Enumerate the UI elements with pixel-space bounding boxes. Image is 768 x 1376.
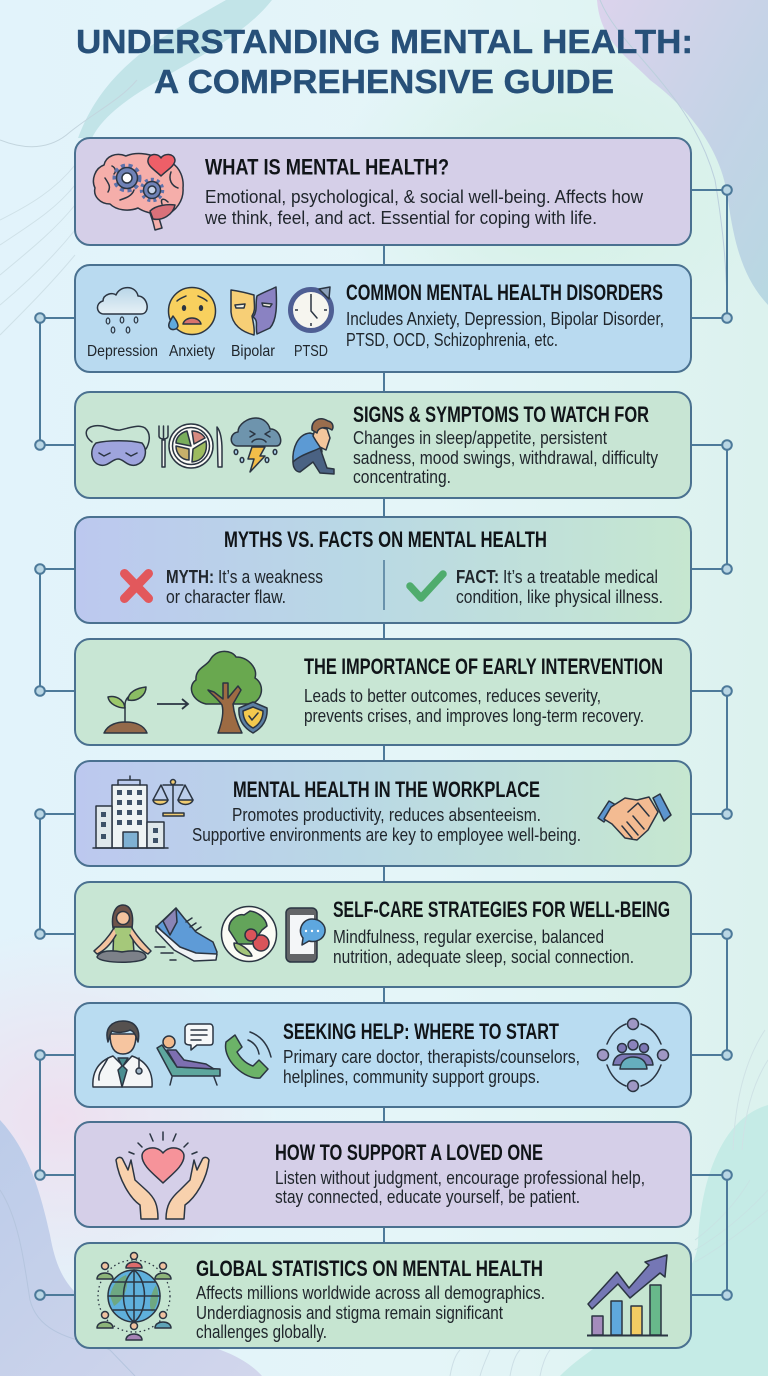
icon labels: [87, 343, 328, 360]
icon: brain with gears and heart: [93, 154, 183, 230]
fact text: condition, like physical illness.: [456, 587, 663, 607]
heading: MENTAL HEALTH IN THE WORKPLACE: [233, 777, 540, 802]
description: prevents crises, and improves long-term recovery.: [304, 706, 644, 726]
icon: bipolar masks: [231, 287, 276, 335]
heading: GLOBAL STATISTICS ON MENTAL HEALTH: [196, 1256, 543, 1281]
icon: green check: [410, 574, 443, 598]
icon: storm cloud: [231, 418, 281, 472]
panel: workplace: [75, 761, 691, 866]
icon: running shoe: [155, 908, 217, 961]
panel: what is mental health: [75, 138, 691, 245]
description: [204, 187, 644, 228]
icon: doctor: [93, 1021, 152, 1087]
description: sadness, mood swings, withdrawal, difficulty: [353, 448, 658, 468]
panel: signs and symptoms: [75, 392, 691, 498]
icon: tree with shield: [191, 651, 267, 733]
title: A COMPREHENSIVE GUIDE: [154, 63, 614, 100]
icon: anxious face: [168, 288, 216, 334]
description: Mindfulness, regular exercise, balanced: [333, 927, 604, 947]
description: stay connected, educate yourself, be patient.: [275, 1187, 580, 1207]
description: [275, 1168, 645, 1207]
description: Leads to better outcomes, reduces severity,: [304, 686, 601, 706]
description: challenges globally.: [196, 1322, 327, 1342]
description: Includes Anxiety, Depression, Bipolar Disorder,: [346, 309, 664, 329]
myth text: [166, 567, 323, 607]
panel: global statistics: [75, 1243, 691, 1348]
description: [192, 805, 581, 845]
panel: myths vs facts: [75, 517, 691, 623]
heading: MYTHS VS. FACTS ON MENTAL HEALTH: [224, 527, 547, 552]
icon: plate with food: [159, 424, 222, 468]
description: concentrating.: [353, 467, 451, 487]
fact text: FACT:: [456, 567, 499, 587]
arrow: [157, 699, 188, 709]
myth text: It’s a weakness: [218, 567, 323, 587]
title: UNDERSTANDING MENTAL HEALTH:: [76, 23, 693, 60]
description: [333, 927, 634, 967]
icon: office building and scales: [93, 776, 193, 848]
heading: SIGNS & SYMPTOMS TO WATCH FOR: [353, 402, 649, 427]
description: [353, 428, 658, 487]
description: Listen without judgment, encourage professional help,: [275, 1168, 645, 1188]
description: Emotional, psychological, & social well-being. Affects how: [205, 187, 644, 207]
icon: sad seated person: [293, 419, 334, 474]
description: Promotes productivity, reduces absenteeism.: [232, 805, 541, 825]
description: [346, 309, 664, 350]
icon: growth bar chart: [587, 1255, 668, 1336]
icon: sprout: [104, 687, 147, 733]
icon: salad plate: [222, 906, 276, 962]
description: Changes in sleep/appetite, persistent: [353, 428, 607, 448]
icon: therapy couch: [157, 1024, 220, 1085]
description: Underdiagnosis and stigma remain significant: [196, 1303, 503, 1323]
panel: support a loved one: [75, 1122, 691, 1227]
myth text: MYTH:: [166, 567, 214, 587]
myth text: or character flaw.: [166, 587, 286, 607]
description: [304, 686, 644, 726]
icon labels: Anxiety: [169, 343, 215, 360]
heading: WHAT IS MENTAL HEALTH?: [205, 154, 449, 180]
description: we think, feel, and act. Essential for coping with life.: [204, 208, 597, 228]
heading: COMMON MENTAL HEALTH DISORDERS: [346, 280, 663, 305]
icon labels: Bipolar: [231, 343, 276, 360]
description: Supportive environments are key to employee well-being.: [192, 825, 581, 845]
fact text: [456, 567, 663, 607]
panel: seeking help: [75, 1003, 691, 1107]
description: nutrition, adequate sleep, social connection.: [333, 947, 634, 967]
panel: self-care: [75, 882, 691, 987]
icon labels: PTSD: [294, 343, 328, 360]
fact text: It’s a treatable medical: [503, 567, 658, 587]
description: Primary care doctor, therapists/counselors,: [283, 1047, 580, 1067]
description: [283, 1047, 580, 1087]
icon: phone with signal: [226, 1032, 271, 1078]
icon: sleep mask: [86, 426, 149, 465]
icon: phone with chat bubble: [286, 908, 325, 962]
icon: globe with people: [97, 1252, 171, 1340]
heading: HOW TO SUPPORT A LOVED ONE: [275, 1140, 543, 1165]
panel: common disorders: [75, 265, 691, 372]
description: [196, 1283, 545, 1342]
icon labels: Depression: [87, 343, 158, 360]
icon: handshake: [598, 794, 671, 840]
connector network: [35, 185, 732, 1300]
icon: hands holding heart: [116, 1132, 209, 1219]
icon: meditating person: [94, 905, 151, 962]
description: PTSD, OCD, Schizophrenia, etc.: [346, 330, 558, 350]
icon: red cross: [124, 574, 148, 598]
icon: rain cloud: [97, 288, 147, 333]
icon: community group: [598, 1018, 668, 1092]
title: [76, 23, 693, 100]
heading: SEEKING HELP: WHERE TO START: [283, 1019, 559, 1044]
description: Affects millions worldwide across all demographics.: [196, 1283, 545, 1303]
panel: early intervention: [75, 639, 691, 745]
description: helplines, community support groups.: [283, 1067, 540, 1087]
icon: PTSD clock: [290, 287, 332, 330]
divider: [383, 560, 385, 610]
